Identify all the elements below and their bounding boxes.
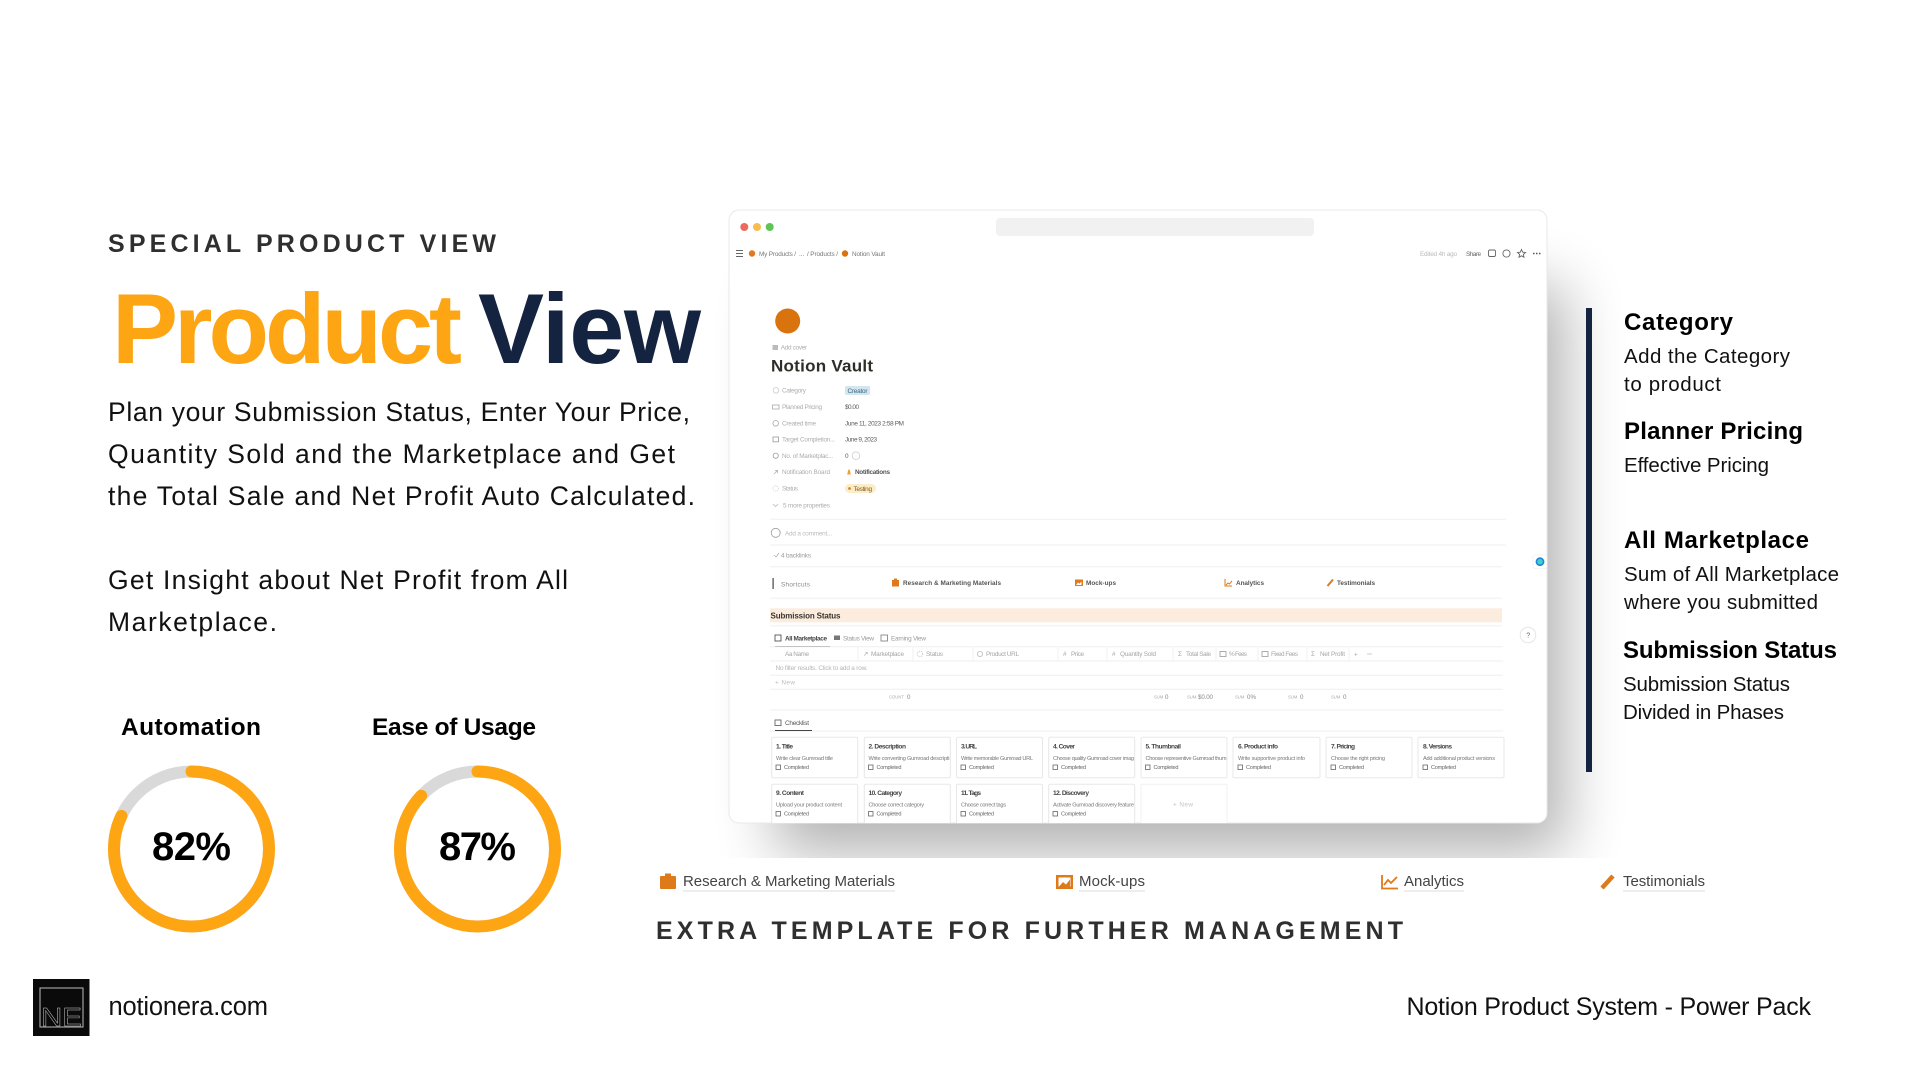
database table: Fixed Fees — [1271, 651, 1298, 658]
checklist cards row 2: 10. Category — [868, 790, 902, 797]
properties list: Notifications — [855, 469, 890, 476]
database table: SUM — [1235, 695, 1245, 700]
help button: ? — [1526, 632, 1530, 640]
shortcuts row: Testimonials — [1337, 580, 1375, 587]
checklist cards row 2: Choose correct category — [868, 802, 924, 808]
feature: all marketplace: Sum of All Marketplace — [1624, 563, 1839, 586]
properties list: No. of Marketplac... — [782, 453, 833, 460]
shortcuts row: Shortcuts — [781, 581, 810, 588]
properties list: Testing — [854, 486, 872, 493]
properties list: June 11, 2023 2:58 PM — [845, 420, 904, 428]
properties list: 5 more properties — [783, 502, 830, 510]
link: analytics — [1382, 873, 1464, 891]
section heading: extra template: EXTRA TEMPLATE FOR FURTHER MANAGEMENT — [656, 917, 1403, 945]
checklist tab — [775, 720, 812, 730]
checklist cards row 1: 5. Thumbnail — [1146, 744, 1181, 750]
breadcrumb: / Products / — [807, 251, 838, 258]
database table: 0 — [1343, 694, 1347, 701]
breadcrumb: Notion Vault — [852, 251, 885, 258]
database table: % Fees — [1229, 651, 1247, 658]
database table: SUM — [1187, 695, 1197, 700]
database table: Aa Name — [785, 651, 809, 658]
database view tabs: All Marketplace — [785, 635, 827, 642]
widget badge — [1533, 555, 1547, 568]
title: Product — [112, 273, 462, 384]
gauge: ease of usage — [372, 714, 555, 926]
shortcuts row: Analytics — [1236, 580, 1264, 587]
description text: Marketplace. — [108, 607, 277, 637]
properties list: 0 — [845, 453, 849, 460]
checklist cards row 2: Upload your product content — [776, 802, 842, 808]
database table: Σ — [1178, 651, 1182, 658]
link: mock-ups: Mock-ups — [1079, 873, 1145, 890]
logo — [33, 979, 90, 1036]
database table: # — [1112, 651, 1116, 658]
checklist cards row 2: Activate Gumroad discovery feature — [1053, 802, 1134, 808]
database table: + New — [775, 680, 795, 687]
shortcuts row — [772, 578, 1375, 589]
database table: Product URL — [986, 651, 1019, 658]
checklist cards row 1: Write supportive product info — [1238, 756, 1305, 762]
database table: 0 — [1165, 694, 1169, 701]
backlinks: 4 backlinks — [781, 552, 811, 559]
description text: the Total Sale and Net Profit Auto Calculated. — [108, 481, 695, 511]
url bar — [996, 218, 1314, 236]
database view tabs: Status View — [843, 635, 874, 642]
feature: all marketplace — [1623, 527, 1839, 614]
checklist cards row 1: Choose the right pricing — [1331, 756, 1385, 762]
submission status heading band — [770, 608, 1502, 622]
window traffic lights — [740, 223, 774, 231]
checklist cards row 1: Completed — [876, 765, 902, 771]
database table: COUNT — [889, 695, 904, 700]
properties list: Notification Board — [782, 469, 830, 476]
properties list: Created time — [782, 420, 816, 428]
database table: Marketplace — [871, 651, 904, 658]
description text: Get Insight about Net Profit from All — [108, 565, 568, 595]
shortcuts row: Research & Marketing Materials — [903, 580, 1001, 587]
checklist cards row 1: Completed — [969, 765, 994, 771]
checklist cards row 1: 1. Title — [776, 744, 793, 750]
database table: 0% — [1247, 694, 1256, 701]
checklist cards row 2: 12. Discovery — [1053, 790, 1089, 797]
feature: submission status: Divided in Phases — [1623, 701, 1784, 724]
template links row — [660, 873, 1705, 891]
properties list: June 9, 2023 — [845, 436, 877, 444]
checklist cards row 1: Choose quality Gumroad cover imag — [1053, 756, 1134, 762]
checklist cards row 1: Write converting Gumroad descripti — [868, 756, 950, 762]
description text — [108, 397, 695, 637]
toolbar: Share — [1466, 251, 1481, 258]
checklist cards row 2 — [771, 784, 1228, 823]
feature: all marketplace: where you submitted — [1623, 591, 1818, 614]
description text: Quantity Sold and the Marketplace and Get — [108, 439, 676, 469]
website label: notionera.com — [108, 993, 268, 1021]
submission status heading band: Submission Status — [770, 612, 841, 621]
breadcrumb — [736, 250, 885, 258]
database table: Status — [926, 651, 943, 658]
link: testimonials: Testimonials — [1623, 873, 1705, 890]
properties list — [772, 386, 904, 510]
vertical accent bar — [1586, 308, 1592, 772]
divider lines — [770, 519, 1506, 598]
checklist cards row 2: 9. Content — [776, 790, 805, 797]
database table: No filter results. Click to add a row. — [776, 665, 868, 672]
logo: NE — [41, 1002, 82, 1032]
eyebrow heading: SPECIAL PRODUCT VIEW — [108, 230, 496, 258]
database table: Total Sale — [1186, 651, 1211, 658]
properties list: Creator — [848, 388, 868, 395]
footer product name: Notion Product System - Power Pack — [1406, 993, 1812, 1021]
database table: # — [1063, 651, 1067, 658]
checklist cards row 1: Add additional product versions — [1423, 756, 1495, 762]
checklist cards row 1: Completed — [1339, 765, 1364, 771]
checklist cards row 1: Choose representive Gumroad thum — [1146, 756, 1227, 762]
panel: product screenshot window — [729, 210, 1547, 834]
page icon — [775, 308, 800, 334]
gauge: ease of usage: Ease of Usage — [372, 714, 536, 741]
database view tabs: Earning View — [891, 635, 926, 642]
database table: Net Profit — [1320, 651, 1345, 658]
checklist cards row 1: Write clear Gumroad title — [776, 756, 833, 762]
gauge: ease of usage: 87% — [439, 825, 516, 869]
gauge: automation: Automation — [121, 714, 261, 741]
feature: planner pricing: Effective Pricing — [1624, 454, 1769, 477]
database table — [770, 647, 1503, 731]
checklist cards row 1: Completed — [1246, 765, 1271, 771]
breadcrumb: My Products / — [759, 251, 796, 258]
add cover: Add cover — [781, 344, 808, 352]
toolbar — [1420, 250, 1540, 258]
properties list: Category — [782, 388, 807, 394]
title — [112, 273, 702, 384]
checklist cards row 1: 7. Pricing — [1331, 744, 1355, 750]
checklist cards row 2: Completed — [784, 812, 809, 818]
checklist cards row 1: Write memorable Gumroad URL — [961, 756, 1033, 762]
add cover — [772, 345, 807, 350]
checklist cards row 2: Completed — [876, 812, 902, 818]
checklist cards row 1: Completed — [784, 765, 809, 771]
checklist cards row 1 — [772, 737, 1504, 778]
database table: Price — [1071, 651, 1084, 658]
database table: 0 — [907, 694, 911, 701]
checklist tab: Checklist — [785, 720, 809, 727]
shortcuts row: Mock-ups — [1086, 580, 1116, 587]
feature: category: Add the Category — [1624, 345, 1791, 368]
checklist cards row 1: 8. Versions — [1423, 744, 1452, 750]
properties list: Status — [782, 486, 798, 492]
database table: ↗ — [863, 651, 868, 658]
feature: planner pricing — [1624, 418, 1803, 477]
checklist cards row 2: + New — [1173, 801, 1193, 808]
comment field: Add a comment... — [785, 530, 832, 538]
checklist cards row 2: Completed — [969, 812, 994, 818]
checklist cards row 1: Completed — [1154, 765, 1178, 771]
feature: submission status — [1623, 637, 1837, 724]
database table: 0 — [1300, 694, 1304, 701]
checklist cards row 1: 6. Product info — [1238, 744, 1278, 750]
toolbar: Edited 4h ago — [1420, 251, 1457, 258]
database table: Quantity Sold — [1120, 651, 1156, 658]
database table: $0.00 — [1198, 694, 1214, 701]
help button — [1520, 627, 1536, 643]
checklist cards row 1: 4. Cover — [1053, 744, 1075, 750]
properties list: Planned Pricing — [782, 404, 822, 411]
link: analytics: Analytics — [1404, 873, 1464, 890]
checklist cards row 1: 3. URL — [961, 744, 977, 750]
feature: submission status: Submission Status — [1623, 673, 1790, 696]
window shadow — [775, 285, 1565, 853]
backlinks — [774, 552, 811, 558]
feature: planner pricing: Planner Pricing — [1624, 418, 1803, 445]
properties list: Target Completion... — [782, 436, 835, 444]
feature: all marketplace: All Marketplace — [1624, 527, 1809, 554]
checklist cards row 1: Completed — [1431, 765, 1456, 771]
page title: Notion Vault — [771, 357, 873, 376]
checklist cards row 2: Choose correct tags — [961, 802, 1006, 808]
checklist cards row 1: 2. Description — [868, 744, 906, 750]
gauge: automation — [114, 714, 269, 926]
checklist cards row 2: 11. Tags — [961, 790, 981, 797]
feature: submission status: Submission Status — [1623, 637, 1837, 664]
feature: category: to product — [1624, 373, 1721, 396]
breadcrumb: ... — [799, 251, 805, 258]
gauge: automation: 82% — [152, 825, 231, 869]
checklist cards row 2: Completed — [1061, 812, 1086, 818]
title: View — [478, 273, 702, 384]
database table: SUM — [1331, 695, 1341, 700]
database table: SUM — [1154, 695, 1164, 700]
feature: category: Category — [1624, 309, 1734, 336]
database table: + — [1354, 652, 1358, 658]
feature: category — [1624, 309, 1791, 396]
database view tabs — [770, 626, 1502, 646]
database table: Σ — [1311, 651, 1315, 658]
properties list: $0.00 — [845, 404, 859, 411]
comment field — [771, 528, 832, 538]
description text: Plan your Submission Status, Enter Your Price, — [108, 397, 690, 427]
link: research and marketing materials: Research & Marketing Materials — [683, 873, 895, 890]
database table: SUM — [1288, 695, 1298, 700]
checklist cards row 1: Completed — [1061, 765, 1086, 771]
